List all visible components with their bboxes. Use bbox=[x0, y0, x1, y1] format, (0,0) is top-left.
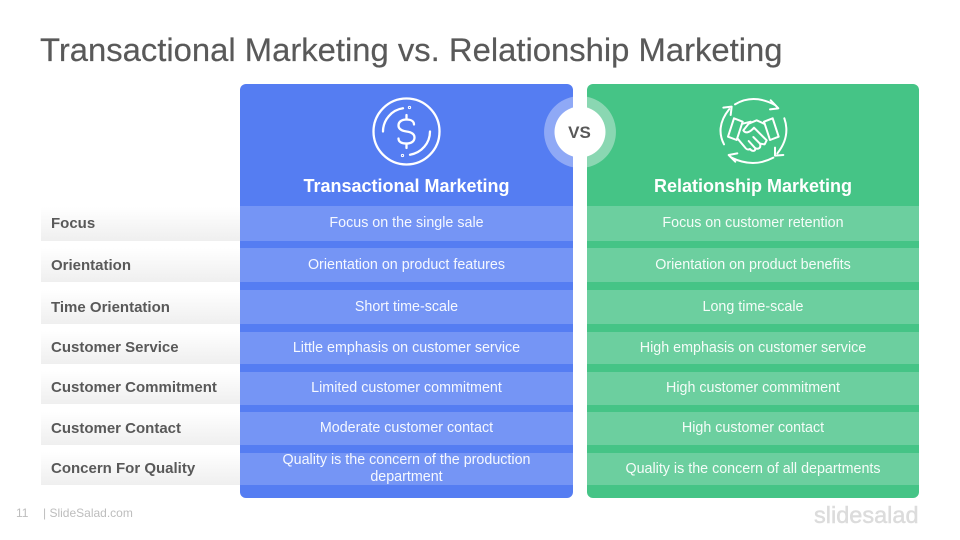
label: concern for quality bbox=[41, 452, 240, 485]
label: customer service: Customer Service bbox=[51, 339, 179, 356]
row bbox=[587, 453, 919, 485]
label: time orientation bbox=[41, 290, 240, 324]
label: orientation bbox=[41, 248, 240, 282]
vs badge: VS bbox=[568, 123, 591, 142]
heading: transactional marketing: Transactional Marketing bbox=[303, 176, 510, 196]
row: High customer commitment bbox=[666, 380, 840, 396]
page number: 11 bbox=[16, 506, 28, 520]
row: Short time-scale bbox=[355, 299, 458, 315]
label: customer service bbox=[41, 331, 240, 364]
row: High emphasis on customer service bbox=[640, 340, 866, 356]
label: focus bbox=[41, 207, 240, 241]
row bbox=[587, 248, 919, 282]
title: Transactional Marketing vs. Relationship Marketing bbox=[40, 31, 783, 68]
row labels bbox=[41, 214, 240, 485]
row: Little emphasis on customer service bbox=[293, 340, 520, 356]
row: Quality is the concern of all departments bbox=[625, 460, 881, 476]
footer source: | SlideSalad.com bbox=[43, 506, 133, 520]
label: customer contact: Customer Contact bbox=[51, 420, 181, 437]
panel: transactional marketing bbox=[240, 84, 573, 498]
row bbox=[587, 332, 919, 364]
row: Orientation on product features bbox=[308, 257, 505, 273]
row bbox=[587, 372, 919, 405]
row: Limited customer commitment bbox=[311, 380, 502, 396]
icon: handshake bbox=[720, 98, 788, 164]
row: Focus on customer retention bbox=[662, 214, 844, 230]
row: Focus on the single sale bbox=[329, 214, 484, 230]
label: time orientation: Time Orientation bbox=[51, 298, 170, 316]
row bbox=[240, 206, 573, 241]
panel: relationship marketing bbox=[587, 84, 919, 498]
row bbox=[240, 372, 573, 405]
row bbox=[587, 290, 919, 324]
row bbox=[240, 453, 573, 485]
icon: dollar bbox=[372, 97, 441, 166]
row: Moderate customer contact bbox=[320, 420, 493, 436]
row bbox=[587, 206, 919, 241]
heading: relationship marketing: Relationship Marketing bbox=[654, 176, 852, 196]
row bbox=[240, 290, 573, 324]
label: customer commitment bbox=[41, 371, 240, 404]
row bbox=[240, 332, 573, 364]
label: customer contact bbox=[41, 412, 240, 445]
row: Long time-scale bbox=[703, 299, 803, 315]
label: focus: Focus bbox=[51, 214, 95, 232]
row: Quality is the concern of the production bbox=[283, 452, 530, 468]
row: High customer contact bbox=[682, 420, 824, 436]
row bbox=[240, 248, 573, 282]
vs badge bbox=[544, 96, 616, 168]
row bbox=[587, 412, 919, 445]
label: concern for quality: Concern For Quality bbox=[51, 460, 195, 477]
label: customer commitment: Customer Commitment bbox=[51, 379, 217, 396]
logo: slidesalad bbox=[814, 502, 919, 528]
row: department bbox=[370, 469, 443, 485]
row bbox=[240, 412, 573, 445]
label: orientation: Orientation bbox=[51, 256, 131, 274]
row: Orientation on product benefits bbox=[655, 257, 851, 273]
